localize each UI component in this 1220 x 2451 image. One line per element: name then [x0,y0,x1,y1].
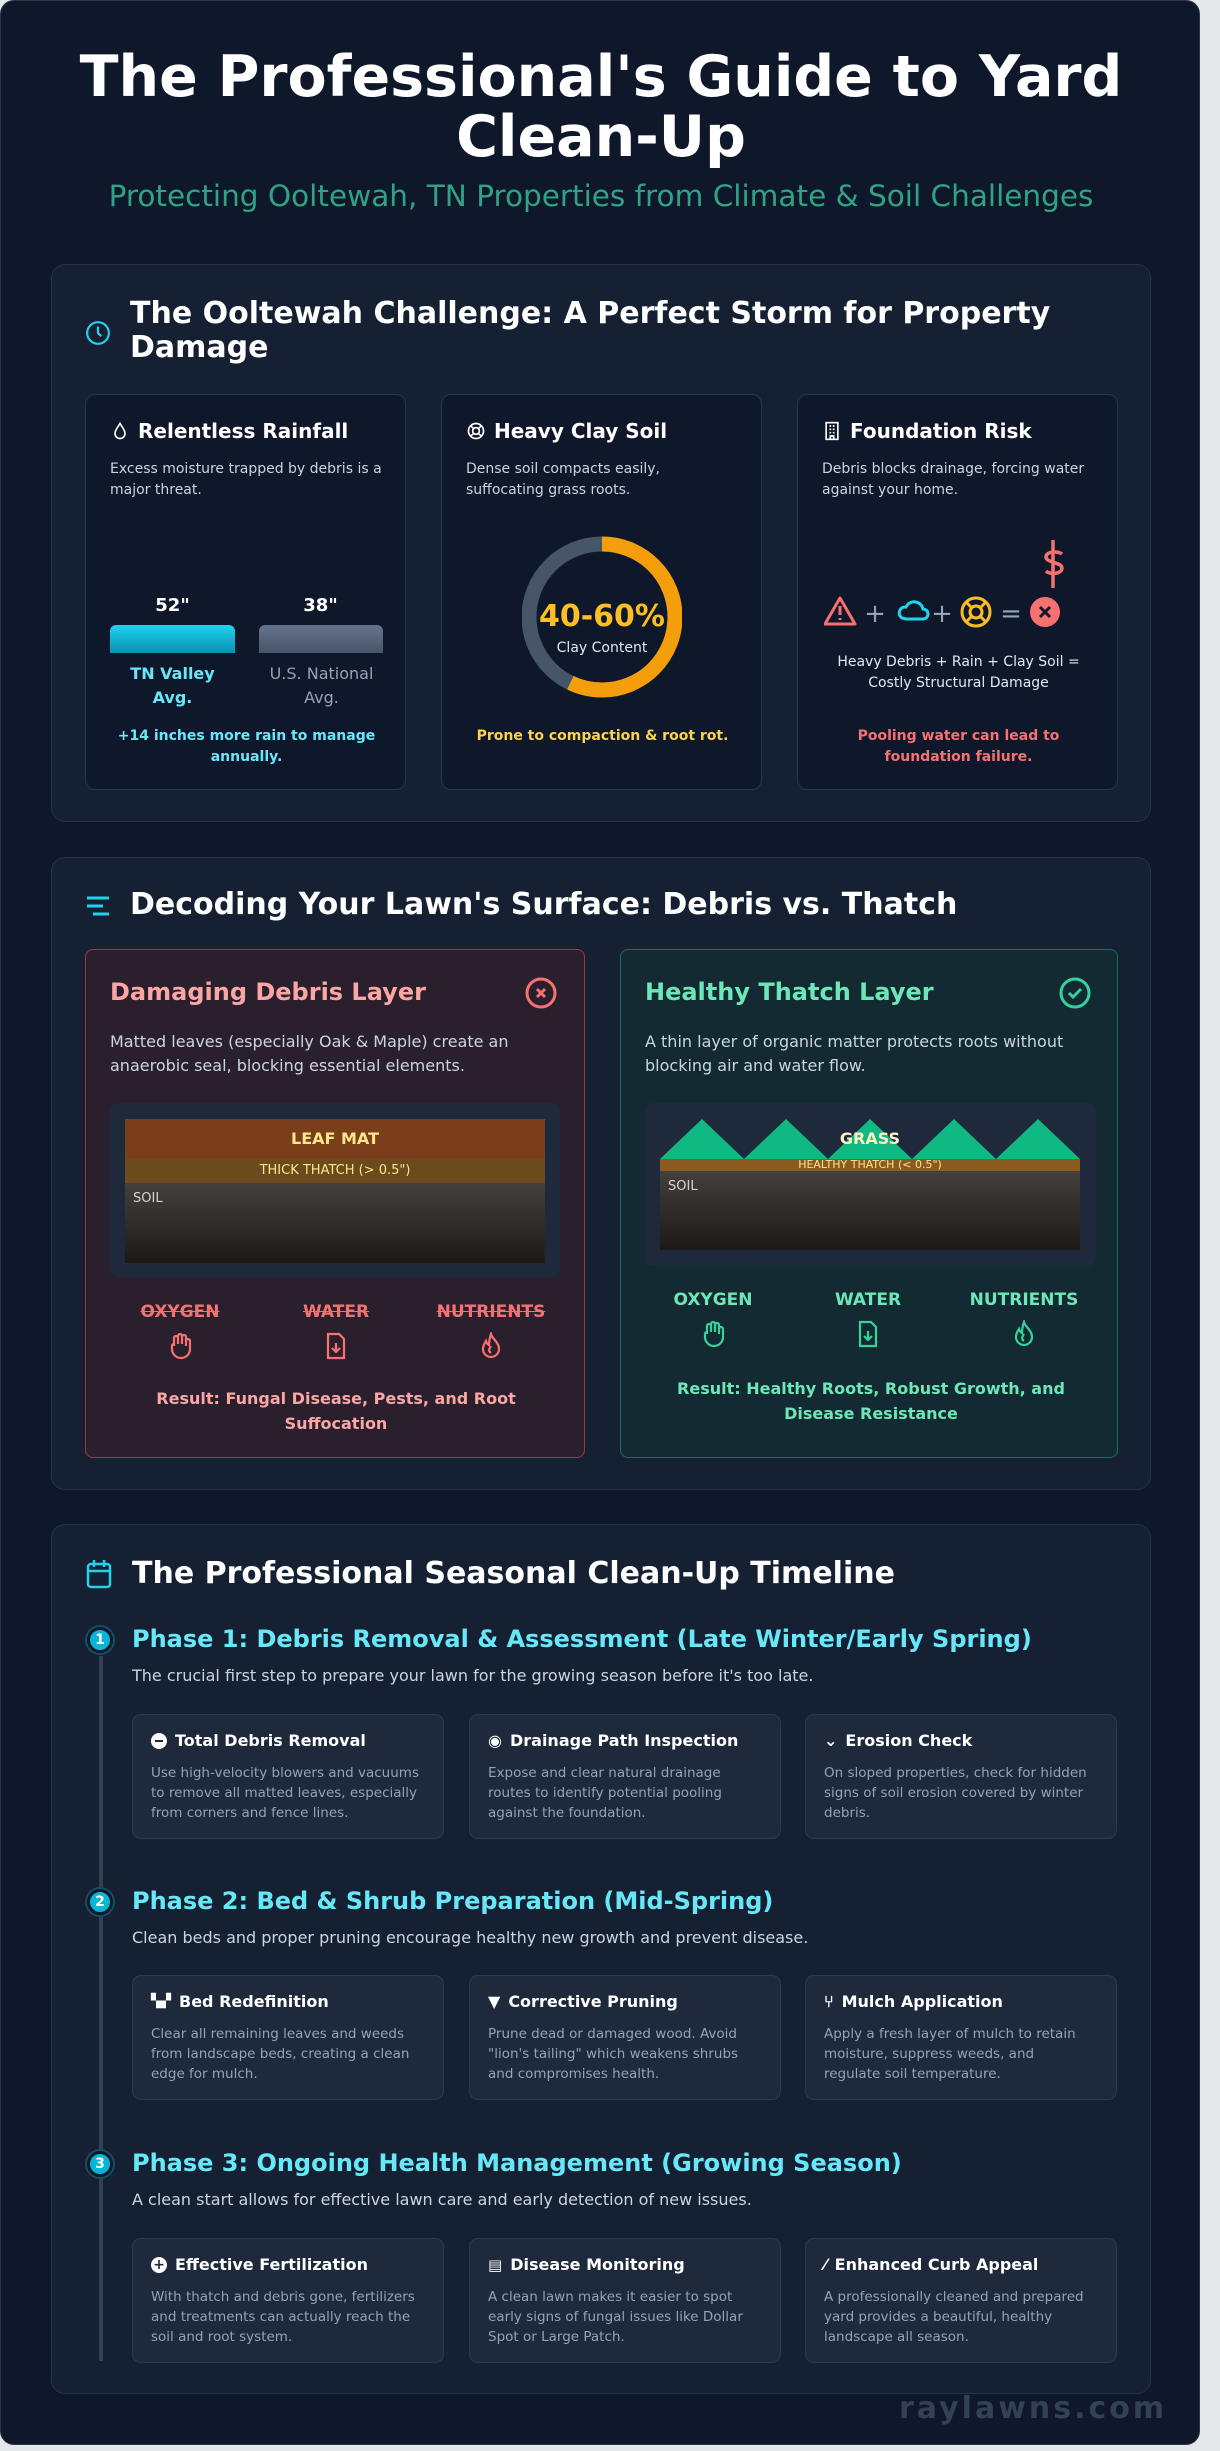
card [805,1714,1117,1839]
diagram: debris layers: THICK THATCH (> 0.5") [260,1163,410,1178]
card: foundation: Pooling water can lead to foundation failure. [858,728,1059,765]
bar chart: Avg. [304,688,339,707]
panel: timeline [51,1524,1151,2394]
card: ▚▞ [151,1994,171,2009]
panel: Ooltewah challenge [51,264,1151,822]
card: rainfall: +14 inches more rain to manage annually. [118,728,375,765]
panel: debris vs thatch [51,857,1151,1490]
card: rainfall: Excess moisture trapped by debris is a major threat. [110,461,382,498]
card: Mulch Application [842,1992,1003,2011]
panel: damaging debris: Damaging Debris Layer [110,978,426,1006]
card [469,1975,781,2100]
icon equation: + [931,599,953,629]
card: Apply a fresh layer of mulch to retain moisture, suppress weeds, and regulate soil temperature. [824,2026,1076,2082]
icon equation [824,540,1064,629]
bar chart: 38" [303,595,338,616]
title: The Professional's Guide to Yard [80,44,1122,110]
result: Result: Healthy Roots, Robust Growth, and Disease Resistance [677,1379,1065,1423]
icon: check circle [1060,978,1090,1008]
phase 1: Phase 1: Debris Removal & Assessment (Late Winter/Early Spring) [132,1625,1032,1653]
title: Clean-Up [456,104,746,170]
card [132,2238,444,2363]
card: ⑂ [824,1992,834,2011]
icon: calendar [86,1560,112,1588]
card: ⌄ [824,1731,837,1750]
panel: healthy thatch: A thin layer of organic matter protects roots without blocking air and water flow. [645,1032,1063,1075]
card: On sloped properties, check for hidden signs of soil erosion covered by winter debris. [824,1765,1087,1821]
bar chart: 52" [155,595,190,616]
phase 1: 1 [95,1632,105,1648]
card [805,2238,1117,2363]
panel: damaging debris: Matted leaves (especially Oak & Maple) create an anaerobic seal, blocking essential elements. [110,1032,508,1075]
donut chart: 40-60% [539,599,665,634]
card: Disease Monitoring [510,2255,685,2274]
blocked elements: NUTRIENTS [437,1302,545,1322]
icon: lines [87,896,109,916]
card: Prune dead or damaged wood. Avoid "lion's tailing" which weakens shrubs and compromises health. [488,2026,738,2082]
card [805,1975,1117,2100]
allowed elements: OXYGEN [673,1290,753,1310]
card: ▼ [488,1992,500,2011]
card: Total Debris Removal [175,1731,366,1750]
diagram: healthy layers: HEALTHY THATCH (< 0.5") [798,1158,942,1171]
card: Effective Fertilization [175,2255,368,2274]
bar chart: U.S. National [270,664,373,683]
card: Corrective Pruning [508,1992,678,2011]
card: clay soil [441,394,762,790]
bar chart: Avg. [153,688,192,707]
phase 2: 2 [95,1894,105,1910]
card [132,1975,444,2100]
phase 3 [85,2149,1117,2363]
title [80,44,1122,170]
donut chart [522,536,682,698]
allowed elements: NUTRIENTS [970,1290,1078,1310]
blocked elements: WATER [303,1302,369,1322]
diagram: debris layers [110,1103,560,1277]
watermark: raylawns.com [899,2391,1167,2426]
card: ◉ [488,1731,502,1750]
card: A professionally cleaned and prepared yard provides a beautiful, healthy landscape all season. [824,2289,1084,2345]
phase 3: 3 [95,2156,105,2172]
panel: healthy thatch: Healthy Thatch Layer [645,978,934,1006]
card: foundation: Costly Structural Damage [868,675,1049,691]
card title: Relentless Rainfall [138,419,348,443]
card: clay soil: Prone to compaction & root rot. [477,728,728,744]
card: rainfall [85,394,406,790]
panel: healthy thatch [620,949,1118,1458]
phase 2: Clean beds and proper pruning encourage healthy new growth and prevent disease. [132,1928,808,1947]
blocked elements: OXYGEN [140,1302,220,1322]
card: Erosion Check [845,1731,972,1750]
phase 3: A clean start allows for effective lawn care and early detection of new issues. [132,2190,752,2209]
card: Expose and clear natural drainage routes to identify potential pooling against the foundation. [488,1765,722,1821]
donut chart: Clay Content [557,640,648,656]
heading: Decoding Your Lawn's Surface: Debris vs. Thatch [130,887,957,922]
allowed elements: WATER [835,1290,901,1310]
card: Bed Redefinition [179,1992,329,2011]
card: A clean lawn makes it easier to spot early signs of fungal issues like Dollar Spot or Large Patch. [488,2289,743,2345]
card: foundation: Heavy Debris + Rain + Clay Soil = [837,654,1080,670]
card: Use high-velocity blowers and vacuums to remove all matted leaves, especially from corners and fence lines. [151,1765,419,1821]
subtitle: Protecting Ooltewah, TN Properties from Climate & Soil Challenges [109,179,1093,213]
allowed elements [673,1290,1078,1348]
result: Result: Fungal Disease, Pests, and Root Suffocation [156,1389,516,1433]
card: foundation: Debris blocks drainage, forcing water against your home. [822,461,1084,498]
heading: timeline: The Professional Seasonal Clean-Up Timeline [132,1556,895,1591]
icon: clock [86,321,110,345]
icon: x circle [526,978,556,1008]
phase 1 [85,1625,1117,1839]
card: Drainage Path Inspection [510,1731,738,1750]
diagram: healthy layers: SOIL [668,1179,698,1194]
card: clay soil: Dense soil compacts easily, suffocating grass roots. [466,461,660,498]
diagram: debris layers: LEAF MAT [291,1129,379,1148]
card: ⁄ [824,2255,827,2274]
card: ▤ [488,2256,502,2274]
card: Enhanced Curb Appeal [835,2255,1038,2274]
panel: damaging debris [85,949,585,1458]
card [469,2238,781,2363]
card: foundation: Foundation Risk [850,419,1032,443]
phase 2: Phase 2: Bed & Shrub Preparation (Mid-Spring) [132,1887,773,1915]
card: With thatch and debris gone, fertilizers and treatments can actually reach the soil and root system. [151,2289,415,2345]
card: Clear all remaining leaves and weeds from landscape beds, creating a clean edge for mulch. [151,2026,409,2082]
blocked elements [140,1302,546,1360]
heading: The Ooltewah Challenge: A Perfect Storm for Property Damage [130,296,1050,365]
phase 3: Phase 3: Ongoing Health Management (Growing Season) [132,2149,902,2177]
diagram: healthy layers: GRASS [840,1129,900,1148]
icon equation: = [1000,599,1022,629]
timeline line [99,1656,103,2361]
bar chart [110,595,383,707]
phase 1: The crucial first step to prepare your lawn for the growing season before it's too late. [132,1666,813,1685]
diagram: healthy layers [645,1103,1096,1266]
bar chart: TN Valley [130,664,215,683]
card: + [153,2256,165,2272]
card [132,1714,444,1839]
card [469,1714,781,1839]
card: clay soil: Heavy Clay Soil [494,419,667,443]
card: foundation [797,394,1118,790]
phase 2 [85,1887,1117,2100]
icon equation: + [864,599,886,629]
diagram: debris layers: SOIL [133,1191,163,1206]
